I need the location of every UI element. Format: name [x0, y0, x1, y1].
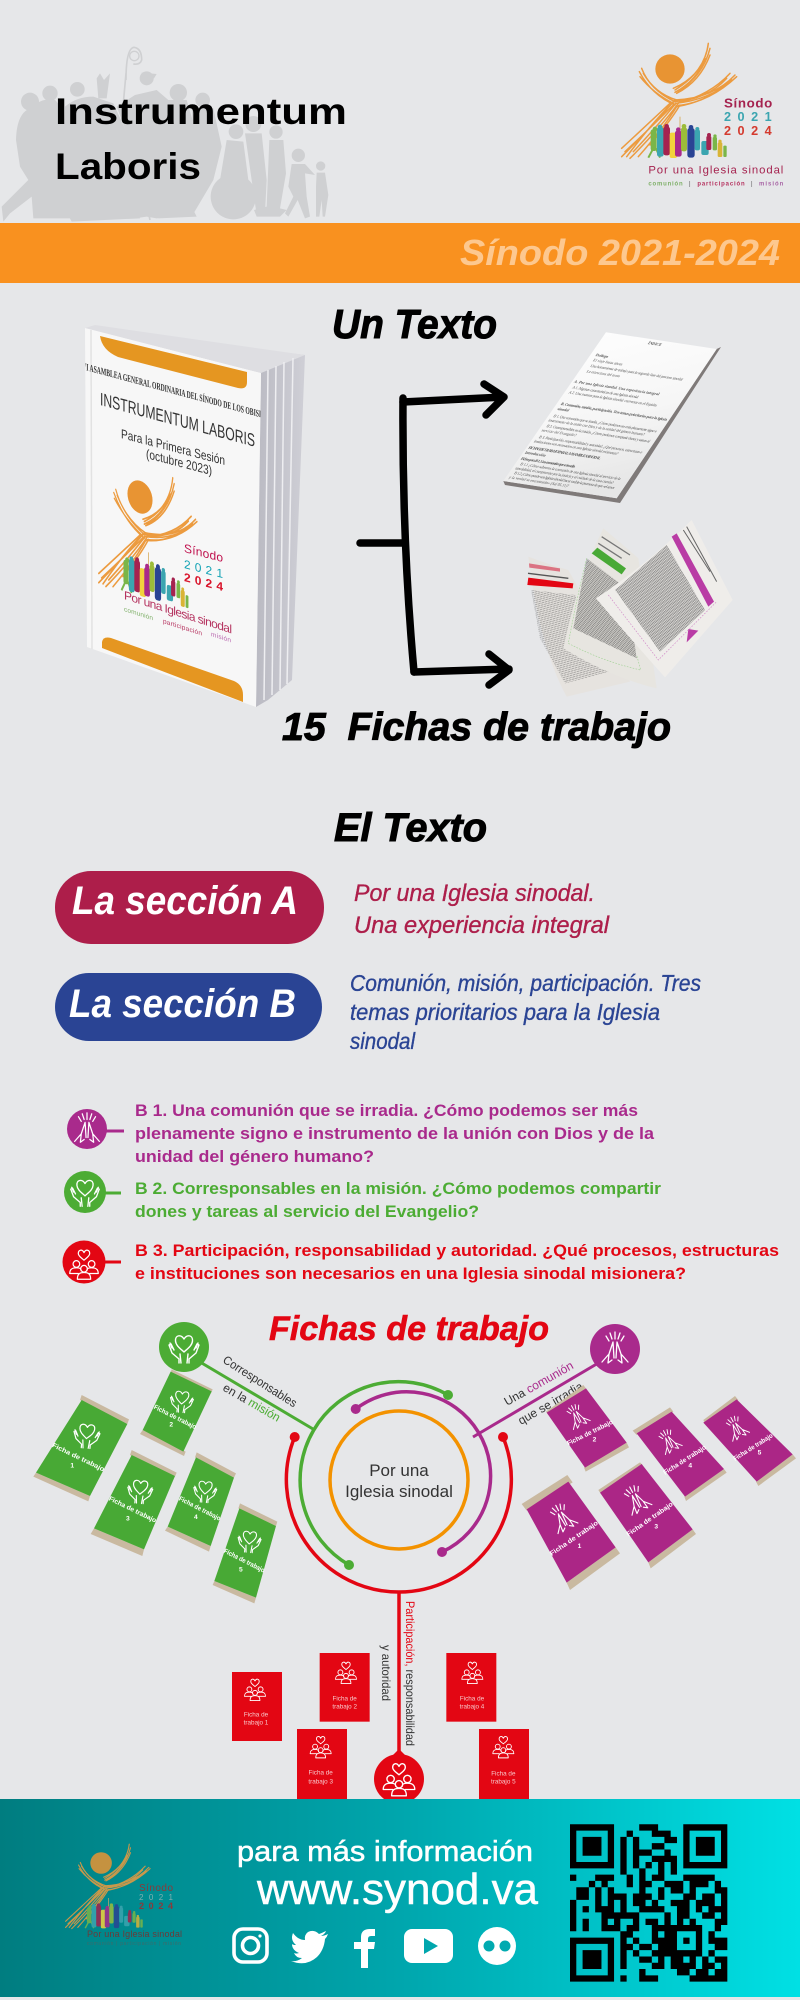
red ficha 3: trabajo 3 — [308, 1778, 333, 1785]
footer band — [0, 1799, 800, 1997]
cover logo: 2021 — [184, 557, 223, 581]
purple fichas — [522, 1385, 796, 1590]
red arc — [286, 1432, 511, 1592]
green connector and icon: en la misión — [220, 1380, 283, 1425]
icon: flickr — [478, 1927, 516, 1965]
footer text: para más información — [237, 1836, 533, 1868]
index text: Una herramienta de trabajo para la segunda fase del proceso sinodal — [589, 363, 685, 382]
red ficha 5 — [479, 1729, 529, 1801]
section B pill: La sección B — [69, 982, 296, 1026]
working sheets — [527, 520, 733, 697]
text: B2: dones y tareas al servicio del Evangelio? — [135, 1202, 479, 1221]
book: Para la Primera Sesión — [121, 426, 225, 468]
red ficha 4: trabajo 4 — [460, 1704, 485, 1711]
footer logo: 2024 — [139, 1901, 173, 1911]
footer logo: 2021 — [139, 1893, 174, 1902]
logo: Sínodo 2021-2024: participación — [697, 182, 745, 188]
purple ficha 1: Ficha de trabajo — [549, 1520, 600, 1558]
green ficha 1 — [33, 1395, 129, 1501]
cover logo: participación — [163, 618, 202, 638]
index text: sinodal — [556, 406, 571, 413]
center text — [345, 1461, 453, 1501]
green ficha 2: 2 — [169, 1422, 173, 1429]
green ficha 1: Ficha de trabajo — [51, 1442, 105, 1473]
book: INSTRUMENTUM LABORIS — [100, 388, 255, 451]
cover text: XVI ASAMBLEA GENERAL ORDINARIA DEL SÍNODO DE LOS OBISPOS — [78, 359, 270, 423]
green arc — [300, 1382, 453, 1570]
red ficha 2: trabajo 2 — [332, 1704, 357, 1711]
text: B3: e instituciones son necesarios en una Iglesia sinodal misionera? — [135, 1264, 686, 1283]
green connector and icon — [159, 1322, 313, 1429]
index text: instituciones son necesarios en una Iglesia sinodal misionera? — [533, 439, 620, 456]
logo: Sínodo 2021-2024: | — [751, 182, 753, 188]
green ficha 3: Ficha de trabajo — [107, 1496, 157, 1525]
red ficha 5: trabajo 5 — [491, 1779, 516, 1786]
red connector and icon: Participación, responsabilidad — [403, 1601, 417, 1746]
red ficha 1: trabajo 1 — [244, 1720, 269, 1727]
book cover — [85, 328, 261, 707]
heading: Fichas de trabajo: Fichas de trabajo — [269, 1310, 549, 1348]
logo: Sínodo 2021-2024: misión — [759, 182, 784, 188]
green ficha 5: 5 — [239, 1567, 243, 1574]
cover logo — [99, 457, 232, 644]
purple connector and icon — [473, 1324, 640, 1437]
purple ficha 2 — [546, 1385, 629, 1472]
index text — [506, 334, 715, 496]
header silhouettes of people — [2, 47, 328, 222]
purple ficha 2: 2 — [593, 1437, 597, 1444]
cover bands — [100, 336, 247, 388]
icon: B3 people — [62, 1240, 121, 1284]
green ficha 3 — [91, 1450, 177, 1556]
logo: Sínodo 2021-2024: 2021 — [724, 110, 772, 124]
purple arc — [351, 1392, 491, 1557]
purple ficha 5 — [703, 1396, 796, 1486]
index text: A 2. Una manera para la Iglesia sinodal: conversar en el Espíritu — [568, 390, 659, 407]
heading: 15 Fichas de trabajo: 15 Fichas de trabajo — [282, 706, 671, 749]
icon: B2 hands and heart — [64, 1171, 121, 1213]
index text: A 1. Algunas características de una Iglesia sinodal — [571, 385, 641, 399]
logo: Sínodo 2021-2024: comunión — [648, 182, 683, 188]
section B description — [350, 970, 701, 1054]
logo: Sínodo 2021-2024: Por una Iglesia sinodal — [648, 164, 783, 176]
red ficha 2 — [320, 1653, 370, 1722]
footer logo: comunión | participación | misión — [87, 1941, 181, 1947]
red ficha 5: Ficha de — [491, 1771, 516, 1778]
red ficha 3: Ficha de — [309, 1770, 333, 1777]
section B description: sinodal — [350, 1028, 416, 1054]
footer logo: Por una Iglesia sinodal — [87, 1929, 182, 1939]
text: B2 — [135, 1179, 661, 1221]
logo: Sínodo 2021-2024: | — [689, 182, 691, 188]
title: Laboris — [55, 146, 201, 187]
purple ficha 1: 1 — [578, 1543, 582, 1550]
center text: Por una — [369, 1461, 429, 1480]
index text: Prólogo — [595, 352, 610, 359]
index text: Introducción — [524, 450, 548, 458]
green ficha 4 — [165, 1452, 236, 1552]
green sheet — [563, 528, 657, 688]
red ficha 4: Ficha de — [460, 1696, 485, 1703]
logo: Sínodo 2021-2024: 2024 — [724, 124, 772, 138]
book — [78, 325, 305, 707]
green fichas — [33, 1369, 277, 1603]
green ficha 2 — [140, 1369, 213, 1456]
index text: B 1.2 ¿Cómo puede una Iglesia sinodal hacer creíble la promesa de que «el amor — [513, 470, 617, 490]
cover logo: misión — [211, 631, 231, 644]
document stack: index — [503, 332, 721, 503]
index text: y la verdad se encontrarán» (Sal 85,11)? — [507, 475, 571, 489]
logo: Sínodo 2021-2024 — [622, 43, 784, 188]
red ficha 2: Ficha de — [333, 1696, 357, 1703]
red sheet — [527, 557, 630, 697]
cover logo: 2024 — [184, 570, 223, 594]
green ficha 2: Ficha de trabajo — [152, 1404, 197, 1431]
text: B1: unidad del género humano? — [135, 1147, 374, 1166]
icon: instagram — [234, 1929, 267, 1962]
index text: B 3. Participación, responsabilidad y autoridad. ¿Qué procesos, estructuras e — [537, 434, 644, 455]
logo: Sínodo 2021-2024: Sínodo — [724, 96, 772, 111]
section A description: Una experiencia integral — [354, 912, 610, 939]
icon: facebook — [354, 1929, 375, 1968]
QR code — [570, 1827, 727, 1978]
cover logo: comunión — [124, 606, 153, 622]
purple ficha 4 — [633, 1407, 727, 1501]
footer logo — [66, 1844, 182, 1947]
text: B1: B 1. Una comunión que se irradia. ¿Cómo podemos ser más — [135, 1101, 638, 1120]
text: B3 — [135, 1241, 779, 1283]
purple ficha 2: Ficha de trabajo — [566, 1419, 614, 1447]
heading: Un Texto: Un Texto — [332, 301, 497, 347]
red ficha 1: Ficha de — [244, 1712, 269, 1719]
purple sheet — [596, 520, 733, 677]
index text: sinodalidad, el compromiso por la justicia y el cuidado de la casa común? — [514, 466, 615, 486]
purple ficha 3 — [598, 1462, 696, 1568]
text: B1: plenamente signo e instrumento de la unión con Dios y de la — [135, 1124, 655, 1143]
cover logo: Por una Iglesia sinodal — [124, 588, 232, 636]
text: B2: B 2. Corresponsables en la misión. ¿Cómo podemos compartir — [135, 1179, 661, 1198]
index text: servicio del Evangelio? — [540, 428, 578, 437]
section B description: Comunión, misión, participación. Tres — [350, 970, 701, 996]
index text: B 2. Corresponsables en la misión. ¿Cómo podemos compartir dones y tareas al — [546, 423, 652, 444]
section A description — [354, 880, 610, 939]
purple ficha 4: Ficha de trabajo — [662, 1444, 708, 1477]
index text: El viaje hasta ahora — [592, 358, 624, 366]
title: Instrumentum — [55, 91, 347, 132]
purple connector and icon: que se irradia — [516, 1379, 586, 1428]
green ficha 1: 1 — [70, 1462, 74, 1469]
orange banner — [0, 223, 800, 283]
red connector and icon — [374, 1593, 424, 1804]
text: B3: B 3. Participación, responsabilidad y autoridad. ¿Qué procesos, estructuras — [135, 1241, 779, 1260]
cover logo: Sínodo — [184, 541, 223, 565]
footer band: www.synod.va — [256, 1865, 539, 1914]
green ficha 4: Ficha de trabajo — [177, 1496, 222, 1523]
icon: youtube — [404, 1929, 453, 1963]
red connector and icon: y autoridad — [379, 1645, 393, 1701]
index text: Fichas para B 1. Una comunión que se irradia — [520, 456, 577, 469]
section B description: temas prioritarios para la Iglesia — [350, 999, 660, 1025]
purple connector and icon: Una comunión — [502, 1358, 576, 1409]
text: B1 — [135, 1101, 655, 1166]
bracket arrows — [360, 384, 509, 685]
index text: instrumento de la unión con Dios y de la unidad del género humano? — [547, 418, 647, 437]
red fichas — [232, 1653, 529, 1801]
green ficha 5 — [213, 1503, 277, 1603]
heading: El Texto: El Texto — [334, 806, 487, 850]
index text: La estructura del texto — [585, 369, 622, 378]
icon: B1 praying hands — [67, 1109, 124, 1149]
index text: ÍNDICE — [647, 340, 664, 347]
purple ficha 4: 4 — [688, 1463, 692, 1470]
circular diagram — [286, 1382, 511, 1592]
book: (octubre 2023) — [146, 446, 212, 478]
green ficha 3: 3 — [126, 1516, 130, 1523]
purple ficha 5: Ficha de trabajo — [732, 1432, 774, 1463]
purple ficha 1 — [522, 1475, 620, 1590]
section A pill — [55, 871, 324, 944]
index text: B 1.1 ¿Cómo sabemos la comunión de una Iglesia sinodal al servicio de la — [519, 461, 623, 481]
section B pill — [55, 973, 322, 1041]
section A description: Por una Iglesia sinodal. — [354, 880, 595, 907]
orange banner: Sínodo 2021-2024 — [460, 232, 780, 273]
title — [55, 91, 347, 187]
index text: FICHAS DE TRABAJO PARA LA ASAMBLEA SINODAL — [527, 445, 603, 460]
green ficha 5: Ficha de trabajo — [222, 1548, 266, 1574]
icon: twitter — [291, 1931, 328, 1963]
red ficha 4 — [446, 1653, 496, 1722]
orange ring — [330, 1411, 468, 1549]
index text: B 1. Una comunión que se irradia. ¿Cómo podemos ser más plenamente signo e — [552, 413, 659, 433]
green ficha 4: 4 — [194, 1514, 198, 1521]
red ficha 3 — [297, 1729, 347, 1801]
center text: Iglesia sinodal — [345, 1482, 453, 1501]
footer logo: Sínodo — [139, 1883, 173, 1894]
section A pill: La sección A — [72, 879, 298, 923]
index text: B. Comunión, misión, participación. Tres temas prioritarios para la Iglesia — [560, 401, 669, 422]
red ficha 1 — [232, 1672, 282, 1741]
purple ficha 3: 3 — [654, 1524, 658, 1531]
purple ficha 5: 5 — [758, 1449, 762, 1456]
index text: A. Por una Iglesia sinodal. Una experiencia integral — [573, 379, 662, 396]
green connector and icon: Corresponsables — [220, 1353, 300, 1410]
purple ficha 3: Ficha de trabajo — [625, 1501, 675, 1538]
